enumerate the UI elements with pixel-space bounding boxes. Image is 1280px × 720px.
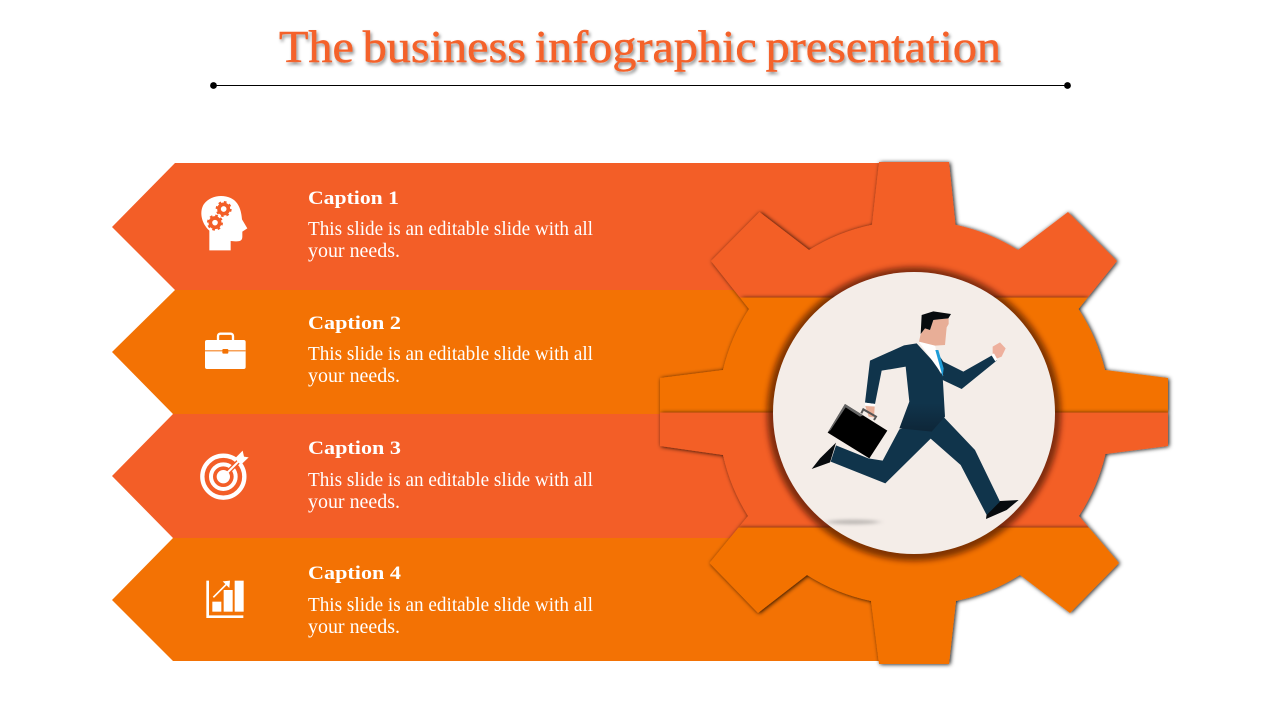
- icon: briefcase: [205, 334, 246, 369]
- caption 4: This slide is an editable slide with all: [308, 595, 594, 616]
- caption 3: Caption 3: [308, 438, 401, 459]
- ground shadow: [827, 520, 879, 524]
- icon: head with gears: [201, 196, 247, 250]
- icon: bar chart: [208, 581, 244, 617]
- caption 3: your needs.: [308, 492, 400, 513]
- arrow band 2: [112, 290, 770, 414]
- caption 2: [205, 313, 594, 387]
- icon: target: [202, 451, 249, 498]
- caption 4: Caption 4: [308, 563, 402, 584]
- central circle: [767, 267, 1061, 561]
- gear: [660, 162, 1168, 664]
- title: The business infographic presentation: [279, 22, 1001, 72]
- arrow band 1: [112, 163, 900, 290]
- caption 2: your needs.: [308, 366, 400, 387]
- caption 3: This slide is an editable slide with all: [308, 470, 594, 491]
- arrow band 4: [112, 538, 900, 661]
- arrow band 3: [112, 414, 770, 538]
- caption 1: This slide is an editable slide with all: [308, 219, 594, 240]
- caption 4: your needs.: [308, 617, 400, 638]
- caption 3: [202, 438, 594, 513]
- caption 4: [208, 563, 594, 638]
- caption 1: [201, 188, 594, 262]
- title divider line: [210, 82, 1071, 89]
- caption 2: This slide is an editable slide with all: [308, 344, 594, 365]
- running businessman: [812, 311, 1019, 519]
- caption 2: Caption 2: [308, 313, 401, 334]
- caption 1: your needs.: [308, 241, 400, 262]
- caption 1: Caption 1: [308, 188, 399, 209]
